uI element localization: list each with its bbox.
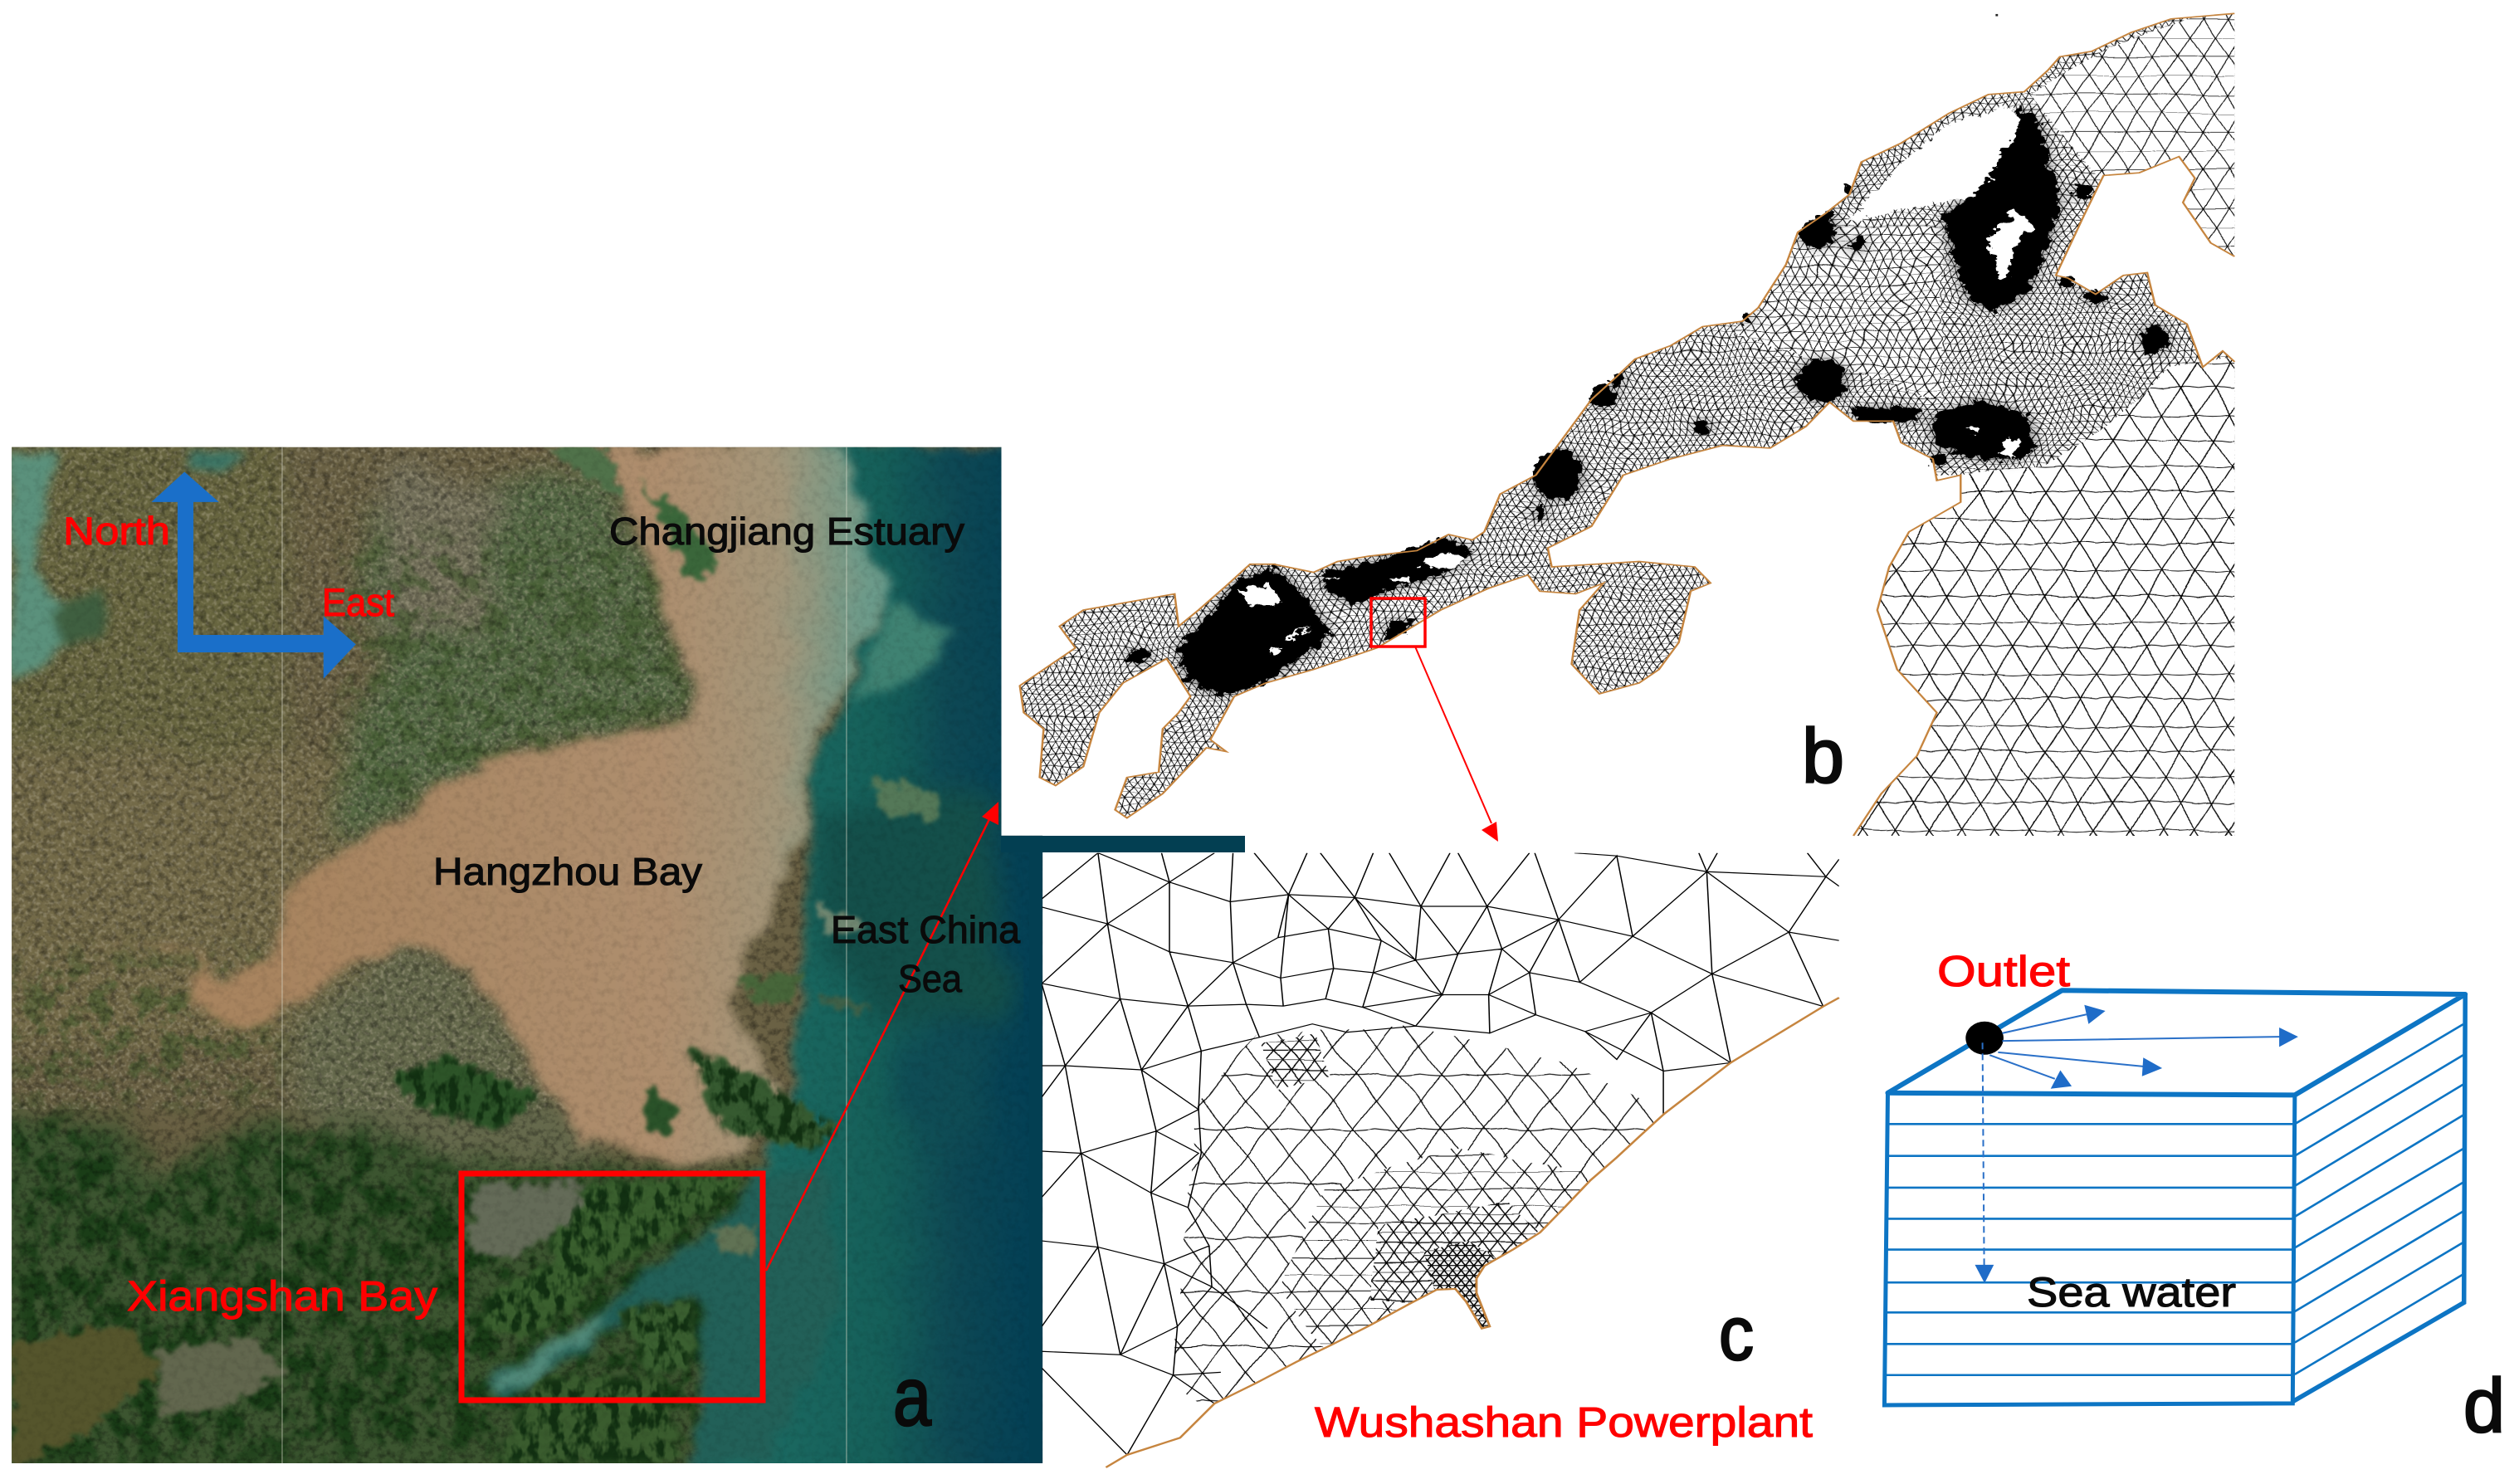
label: Sea water: Sea water [2027, 1269, 2236, 1316]
coastline [1020, 13, 2234, 836]
label: Changjiang Estuary: Changjiang Estuary [609, 510, 964, 553]
islands in mesh [1238, 105, 2036, 656]
Xiangshan Bay box [461, 1174, 763, 1400]
dense mesh clusters [1128, 105, 2167, 696]
compass arrows [151, 472, 356, 679]
ridges on Xiangshan hills and islands [388, 1049, 840, 1463]
map edge strip [1001, 836, 1245, 852]
panel a lower-right water band [1029, 847, 1042, 1463]
label: East China Sea: Sea [898, 957, 962, 1000]
label: Outlet: Outlet [1937, 948, 2071, 996]
red arrow: box to local mesh [1415, 647, 1498, 842]
mountain ridges [12, 1103, 757, 1463]
panel a: satellite map [0, 418, 1245, 1484]
red arrow: map to mesh [766, 802, 998, 1271]
plume arrows [1975, 1005, 2298, 1283]
panel c: local mesh at Wushashan [1042, 853, 1839, 1467]
label: East China Sea [831, 908, 1020, 1000]
panel letter d: d [2463, 1364, 2505, 1448]
label: East China Sea: East China [831, 908, 1020, 951]
panel letter c: c [1719, 1291, 1754, 1376]
outlet coastline [1106, 998, 1839, 1467]
label: Hangzhou Bay: Hangzhou Bay [433, 850, 702, 893]
dense mesh halos [1128, 105, 2167, 696]
green fields [12, 539, 688, 1103]
red zoom box [1371, 598, 1425, 647]
label: Wushashan Powerplant: Wushashan Powerplant [1315, 1399, 1813, 1446]
label: Xiangshan Bay: Xiangshan Bay [127, 1272, 438, 1320]
label: North: North [63, 509, 170, 553]
panel letter b: b [1802, 713, 1844, 799]
panel letter a: a [893, 1350, 931, 1443]
label: East: East [322, 580, 394, 624]
panel d: sea water layers cube [1884, 990, 2465, 1405]
dark offshore water [819, 788, 1005, 1143]
outlet point [1965, 1022, 2004, 1055]
panel b: regional mesh [1018, 12, 2236, 837]
urban speckle [12, 447, 695, 1110]
